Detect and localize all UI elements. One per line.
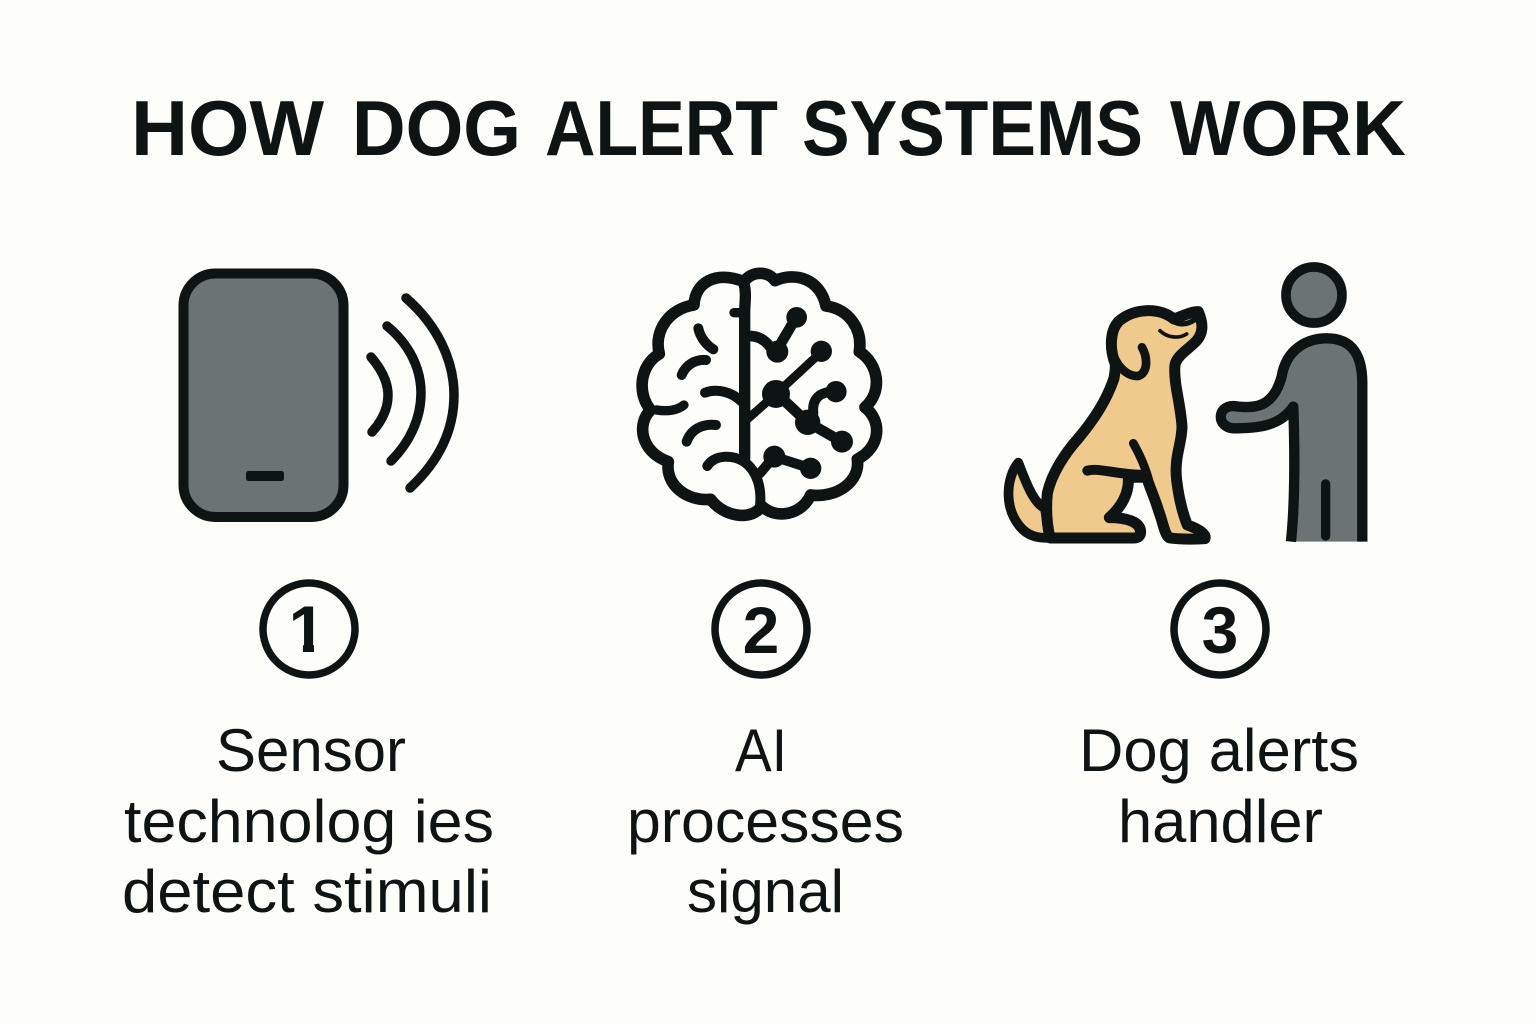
- step 1 text: detect stimuli: [122, 858, 492, 925]
- right hemisphere circuit: [750, 317, 797, 353]
- step 3 text: [1079, 717, 1359, 855]
- title: HOW: [131, 84, 324, 172]
- step 2 number: [715, 583, 807, 675]
- step 3 number: 3: [1202, 593, 1238, 667]
- step 2 text: [627, 717, 904, 925]
- icon: dog sitting facing handler: [1009, 311, 1205, 539]
- title: SYSTEMS: [802, 84, 1143, 172]
- person body outline: [1221, 338, 1362, 542]
- step 1 number: [263, 583, 355, 675]
- dog tail: [1009, 463, 1049, 538]
- step 3 text: Dog alerts: [1079, 717, 1359, 784]
- dog eye: [1160, 331, 1187, 337]
- brain outline: [642, 273, 877, 515]
- step 1 text: [122, 717, 494, 925]
- step 2 text: processes: [627, 788, 904, 855]
- person body fill: [1221, 338, 1362, 542]
- dog mouth: [1174, 318, 1197, 324]
- device body: [184, 274, 344, 517]
- icon: person handler: [1221, 267, 1362, 542]
- signal waves: [371, 298, 454, 488]
- step 3 text: handler: [1118, 788, 1323, 855]
- step 2 text: AI: [735, 717, 787, 784]
- left hemisphere folds: [698, 328, 713, 349]
- title: ALERT: [545, 84, 778, 172]
- dog body: [1047, 311, 1205, 539]
- device button: [246, 471, 284, 481]
- step 1 text: technolog ies: [124, 788, 494, 855]
- step 1 text: Sensor: [216, 717, 406, 784]
- step 3 number: [1174, 583, 1266, 675]
- icon: brain with circuit nodes: [642, 273, 877, 515]
- step 2 number: 2: [743, 593, 779, 667]
- dog leg and thigh lines: [1133, 443, 1148, 478]
- title: WORK: [1170, 84, 1406, 172]
- person leg line: [1312, 484, 1340, 536]
- step 1 number: 1: [289, 592, 325, 666]
- central fissure: [744, 283, 745, 458]
- step 2 text: signal: [687, 858, 844, 925]
- title: DOG: [352, 84, 521, 172]
- dog ear: [1114, 347, 1146, 376]
- person head: [1286, 267, 1342, 323]
- icon: sensor device with signal waves: [184, 274, 454, 517]
- circuit nodes: [762, 307, 853, 479]
- title: [131, 84, 1406, 172]
